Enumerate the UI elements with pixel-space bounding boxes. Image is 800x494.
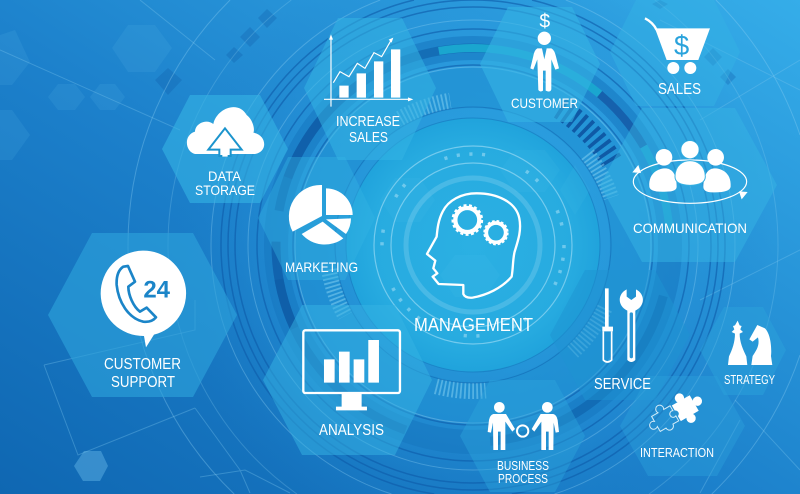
- label: business process: BUSINESS: [497, 458, 549, 473]
- label: data storage: [195, 168, 255, 198]
- icon: rising bar chart: [324, 34, 413, 107]
- label: analysis: ANALYSIS: [319, 422, 384, 439]
- label: increase sales: SALES: [349, 129, 388, 146]
- icon: business partners: [488, 402, 559, 450]
- label: increase sales: INCREASE: [336, 113, 400, 130]
- icon: pie chart: [289, 185, 353, 245]
- label: data storage: STORAGE: [195, 182, 255, 198]
- icon: screwdriver and wrench: [602, 288, 643, 362]
- icon: shopping cart: [645, 18, 710, 74]
- icon: 24-hour phone bubble: 24: [143, 277, 171, 304]
- icon: chess pieces: [728, 321, 772, 365]
- icon: small gear: [484, 221, 508, 244]
- icon: 24-hour phone bubble: [101, 251, 186, 347]
- label: data storage: DATA: [208, 168, 242, 184]
- icon: shopping cart: $: [674, 30, 689, 61]
- icon: large gear: [453, 205, 482, 235]
- label: customer: CUSTOMER: [511, 95, 578, 111]
- central disc: [346, 118, 600, 372]
- icon: customer figure: [530, 12, 559, 92]
- label: business process: [497, 458, 549, 486]
- label: customer support: SUPPORT: [111, 374, 175, 391]
- label: communication: COMMUNICATION: [633, 220, 747, 236]
- small hexagon: [74, 451, 108, 481]
- label: marketing: MARKETING: [285, 259, 358, 275]
- icon: puzzle pieces: [643, 385, 710, 438]
- icon: monitor chart: [303, 330, 400, 410]
- label: strategy: STRATEGY: [724, 372, 775, 387]
- label: customer support: [104, 356, 181, 391]
- label: business process: PROCESS: [498, 471, 548, 486]
- icon: customer figure: $: [539, 12, 550, 33]
- icon: cloud upload: [187, 107, 264, 157]
- icon: group communication: [632, 141, 748, 203]
- label: interaction: INTERACTION: [640, 445, 714, 460]
- label: customer support: CUSTOMER: [104, 356, 181, 373]
- label: service: SERVICE: [594, 376, 651, 393]
- icon: head with gears: [427, 193, 520, 298]
- label: management: MANAGEMENT: [414, 315, 533, 335]
- label: sales: SALES: [658, 81, 701, 98]
- label: increase sales: [336, 113, 400, 146]
